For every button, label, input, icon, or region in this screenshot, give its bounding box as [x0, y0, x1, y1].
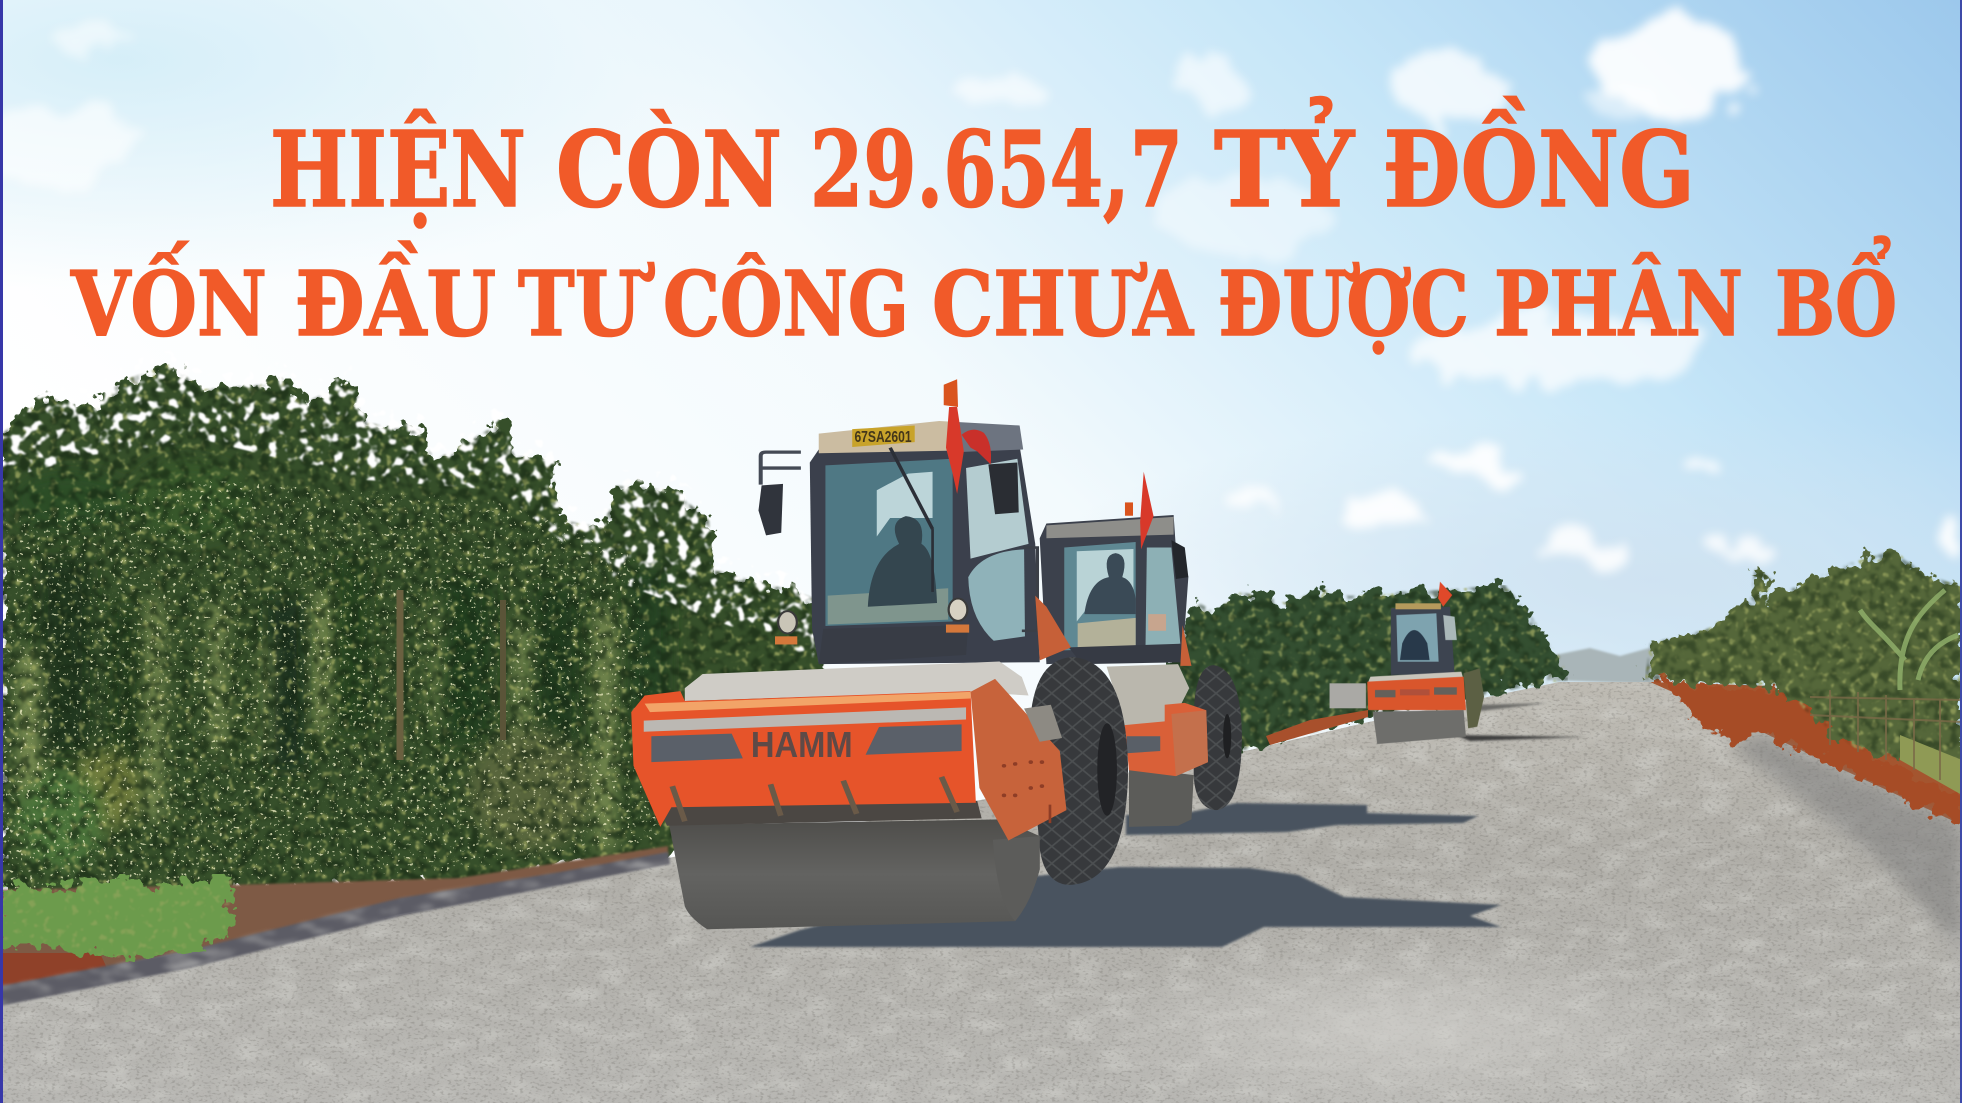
- clouds: [0, 12, 1962, 565]
- second roller cab: [1040, 515, 1188, 664]
- title line 2: TƯ: [518, 251, 655, 356]
- title line 2: PHÂN: [1494, 251, 1743, 356]
- green ground plants: [0, 878, 232, 958]
- second roller rear tyre: [1194, 665, 1242, 810]
- road: [0, 682, 1962, 1103]
- title line 2: [70, 234, 1897, 356]
- far road roller: [1330, 582, 1484, 744]
- cab body: [810, 446, 1040, 664]
- licence plate: 67SA2601: [854, 428, 912, 446]
- licence plate: [852, 425, 915, 447]
- road shadows: [750, 703, 1586, 947]
- title line 1: 29.654,7: [810, 108, 1183, 231]
- second roller drum: [1107, 664, 1189, 725]
- second road roller: [1040, 472, 1242, 827]
- roadside verge under right trees: [1650, 682, 1962, 830]
- title line 2: BỔ: [1775, 234, 1897, 356]
- windshield: [825, 448, 953, 626]
- title line 2: ĐƯỢC: [1218, 251, 1469, 356]
- left hedge of trees: [0, 348, 830, 899]
- orange front frame: [631, 679, 1066, 841]
- second roller orange frame: [1125, 703, 1208, 776]
- second roller flag and beacon: [1140, 472, 1154, 549]
- HAMM logo: HAMM: [751, 724, 853, 765]
- main road roller HAMM: [631, 379, 1128, 929]
- red flag and beacon: [944, 379, 991, 494]
- title line 1: CÒN: [556, 108, 782, 231]
- far roller red flag: [1438, 582, 1452, 607]
- main tyre: [1029, 657, 1128, 885]
- title line 2: CHƯA: [932, 251, 1195, 356]
- title line 1: TỶ: [1214, 95, 1356, 231]
- title line 2: VỐN: [70, 240, 267, 356]
- distant hills: [1546, 645, 1660, 684]
- title: [70, 95, 1897, 356]
- soil strip and kerb on left of road: [0, 846, 670, 1006]
- cab lower and headlights: [775, 599, 969, 664]
- mirror: [758, 452, 801, 535]
- title line 2: CÔNG: [663, 251, 909, 356]
- drum: [658, 661, 1040, 929]
- road-side soil mound: [1655, 680, 1962, 825]
- title line 1: [270, 95, 1695, 231]
- title line 1: ĐỒNG: [1383, 95, 1695, 231]
- title line 2: ĐẦU: [295, 240, 496, 356]
- title line 1: HIỆN: [270, 108, 526, 231]
- right tree line: [1645, 550, 1962, 795]
- side window and door: [966, 459, 1071, 660]
- middle tree line behind far roller: [1170, 585, 1568, 760]
